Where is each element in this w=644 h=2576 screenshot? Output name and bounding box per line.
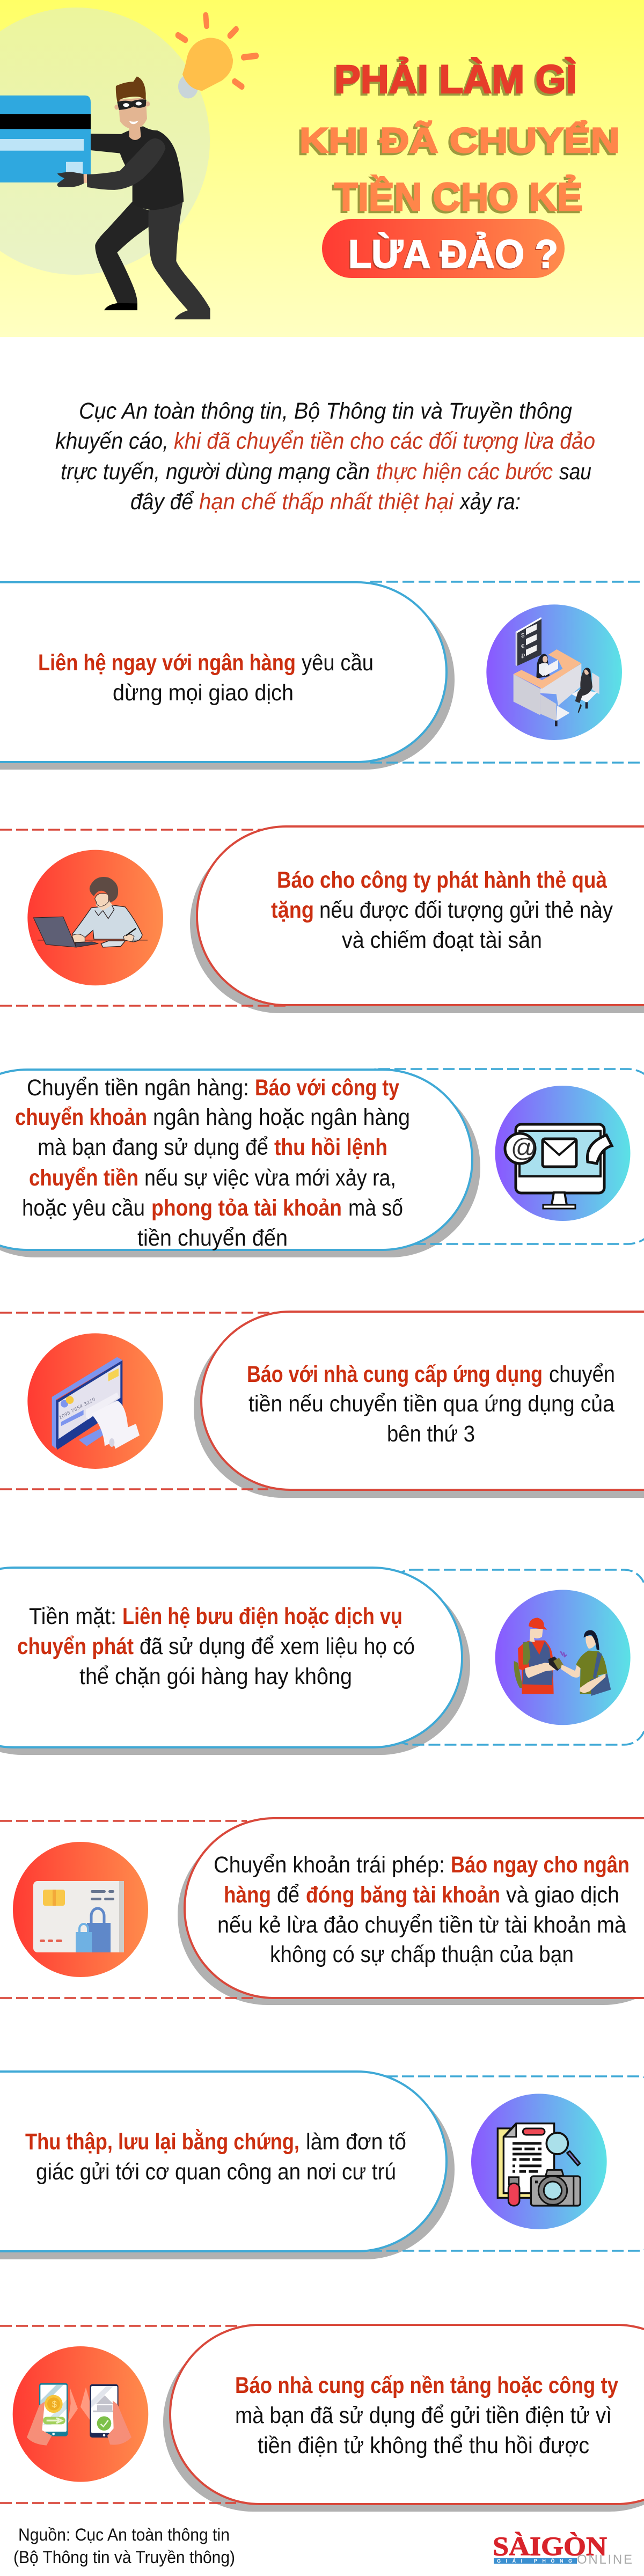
icon: woman at laptop — [27, 850, 163, 985]
intro text: trực tuyến, người dùng mạng cần — [61, 459, 370, 485]
text: step 6: Chuyển khoản trái phép: — [214, 1852, 445, 1878]
text: step 4 — [247, 1362, 615, 1447]
text: step 4: Báo với nhà cung cấp ứng dụng — [247, 1362, 543, 1387]
icon: card with padlock — [13, 1842, 148, 1977]
logo: Sài Gòn Giải Phóng Online: ONLINE — [577, 2552, 632, 2567]
text: step 6: để — [277, 1882, 299, 1908]
icon: phones exchanging money — [13, 2346, 148, 2482]
text: step 3 — [15, 1075, 410, 1251]
icon: bank counter — [486, 604, 622, 740]
text: step 3: mà bạn đang sử dụng để — [38, 1135, 268, 1160]
panel: step 1 bank — [0, 582, 644, 770]
intro text: hạn chế thấp nhất thiệt hại — [199, 489, 454, 515]
text: step 8: tiền điện tử không thể thu hồi được — [258, 2433, 589, 2458]
text: step 1: Liên hệ ngay với ngân hàng — [38, 650, 296, 676]
text: step 3: mà số — [348, 1195, 403, 1221]
text: step 4: tiền nếu chuyển tiền qua ứng dụng của — [248, 1391, 614, 1417]
icon: evidence documents and camera — [471, 2094, 607, 2229]
text: step 5 — [17, 1604, 415, 1689]
text: step 6 — [214, 1852, 630, 1967]
text: step 5: thể chặn gói hàng hay không — [79, 1664, 352, 1689]
text: step 3: hoặc yêu cầu — [22, 1195, 145, 1221]
text: step 1: dừng mọi giao dịch — [113, 680, 294, 706]
icon: bank counter: $ — [521, 633, 525, 639]
text: step 5: chuyển phát — [17, 1634, 134, 1659]
text: step 2: tặng — [271, 897, 314, 923]
source note — [13, 2525, 235, 2567]
text: step 1: yêu cầu — [302, 650, 374, 676]
title — [299, 57, 620, 219]
icon: card screen and receipt: 1098 7654 3210 — [58, 1396, 96, 1420]
text: step 3: phong tỏa tài khoản — [151, 1195, 342, 1221]
panel: step 6 unauthorised transfer — [0, 1818, 644, 2005]
text: step 3: tiền chuyển đến — [137, 1225, 288, 1251]
intro text: thực hiện các bước — [376, 459, 553, 485]
text: step 5: Liên hệ bưu điện hoặc dịch vụ — [122, 1604, 402, 1629]
intro text — [55, 398, 595, 515]
text: step 2 — [271, 867, 613, 953]
intro text: Cục An toàn thông tin, Bộ Thông tin và Truyền thông — [79, 398, 572, 424]
text: step 1 — [38, 650, 374, 706]
illustration: thief with card — [0, 76, 210, 319]
text: step 4: chuyển — [549, 1362, 615, 1387]
intro text: khuyến cáo, — [55, 428, 169, 454]
panel: step 8 crypto platform — [0, 2325, 644, 2512]
intro text: xảy ra: — [459, 489, 521, 515]
title: KHI ĐÃ CHUYỂN — [299, 120, 620, 160]
text: step 5: đã sử dụng để xem liệu họ có — [140, 1634, 415, 1659]
text: step 3: ngân hàng hoặc ngân hàng — [153, 1104, 410, 1130]
text: step 5: Tiền mặt: — [29, 1604, 116, 1629]
panel: step 7 evidence — [0, 2072, 644, 2259]
text: step 6: và giao dịch — [506, 1882, 619, 1908]
text: step 3: chuyển tiền — [29, 1165, 138, 1191]
text: step 7 — [25, 2128, 406, 2185]
text: step 8 — [235, 2373, 618, 2458]
icon: monitor with mail — [495, 1086, 630, 1221]
title: PHẢI LÀM GÌ — [334, 57, 577, 101]
text: step 7: làm đơn tố — [306, 2129, 406, 2155]
text: step 4: bên thứ 3 — [387, 1421, 475, 1447]
text: step 7: giác gửi tới cơ quan công an nơi cư trú — [36, 2159, 396, 2185]
text: step 3: Báo với công ty — [255, 1075, 399, 1101]
icon: card screen and receipt — [27, 1333, 163, 1469]
title: TIỀN CHO KẺ — [334, 175, 583, 219]
icon: light bulb — [178, 15, 256, 98]
text: step 6: đóng băng tài khoản — [306, 1882, 500, 1908]
icon: courier and customer — [495, 1590, 631, 1725]
text: step 3: nếu sự việc vừa mới xảy ra, — [144, 1165, 396, 1191]
panel: step 4 app provider — [0, 1312, 644, 1498]
text: step 8: mà bạn đã sử dụng để gửi tiền điện tử vì — [235, 2403, 612, 2428]
logo: Sài Gòn Giải Phóng Online: GIẢI PHÓNG — [497, 2558, 572, 2564]
icon: bank counter: € — [521, 643, 525, 649]
text: step 6: hàng — [224, 1882, 271, 1908]
icon: bank counter: ₽ — [521, 654, 525, 660]
text: step 3: chuyển khoản — [15, 1104, 147, 1130]
intro text: sau — [559, 459, 591, 485]
title pill — [322, 219, 565, 278]
text: step 3: Chuyển tiền ngân hàng: — [27, 1075, 249, 1101]
intro text: khi đã chuyển tiền cho các đối tượng lừa đảo — [174, 428, 595, 454]
source note: (Bộ Thông tin và Truyền thông) — [13, 2548, 235, 2567]
title pill: LỪA ĐẢO ? — [348, 232, 558, 276]
panel: step 2 gift card — [0, 826, 644, 1013]
panel: step 3 bank transfer — [0, 1069, 644, 1257]
header banner — [0, 0, 644, 337]
logo: Sài Gòn Giải Phóng Online: SÀIGÒN — [493, 2531, 607, 2561]
icon: monitor with mail: @ — [510, 1134, 537, 1162]
text: step 2: và chiếm đoạt tài sản — [342, 927, 542, 953]
logo: Sài Gòn Giải Phóng Online — [493, 2531, 632, 2567]
text: step 2: nếu được đối tượng gửi thẻ này — [319, 897, 613, 923]
source note: Nguồn: Cục An toàn thông tin — [18, 2525, 230, 2544]
text: step 3: thu hồi lệnh — [274, 1135, 387, 1160]
text: step 6: không có sự chấp thuận của bạn — [270, 1942, 574, 1967]
panel: step 5 cash — [0, 1568, 644, 1755]
text: step 7: Thu thập, lưu lại bằng chứng, — [25, 2128, 299, 2155]
icon: phones exchanging money: $ — [52, 2399, 57, 2410]
intro text: đây để — [130, 489, 194, 515]
